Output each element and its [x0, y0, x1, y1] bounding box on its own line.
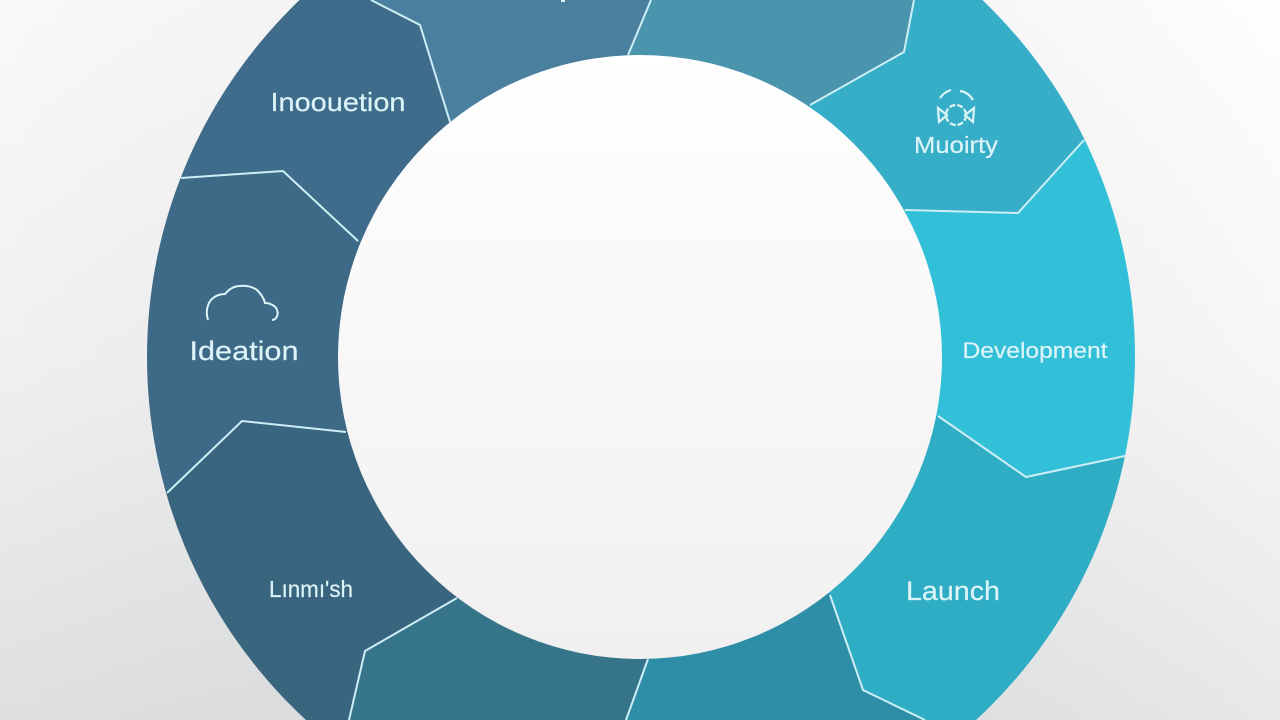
label: top fragment — [561, 0, 565, 2]
segment: unmish — [166, 422, 458, 720]
segment: bottom left — [350, 598, 648, 720]
icon: cycle arrows — [938, 90, 974, 125]
label: Launch: Launch — [906, 576, 1000, 606]
segment: development — [904, 140, 1135, 476]
icon: cloud — [207, 286, 278, 320]
label: Development: Development — [962, 338, 1108, 363]
ring diagram — [147, 0, 1135, 720]
segment: bottom — [627, 593, 922, 720]
segment: innovation — [180, 0, 450, 242]
segment: top left — [373, 0, 650, 122]
center circle — [338, 55, 942, 659]
label: Unmish: Lınmı'sh — [269, 576, 353, 602]
segment: ideation — [147, 172, 361, 493]
label: Innovation: Inoouetion — [270, 87, 406, 117]
segment: launch — [828, 416, 1125, 720]
segment: maturity — [809, 0, 1085, 212]
label: Maturity: Muoirty — [914, 132, 999, 158]
segment: top — [628, 0, 913, 107]
label: Ideation: Ideation — [190, 336, 298, 366]
